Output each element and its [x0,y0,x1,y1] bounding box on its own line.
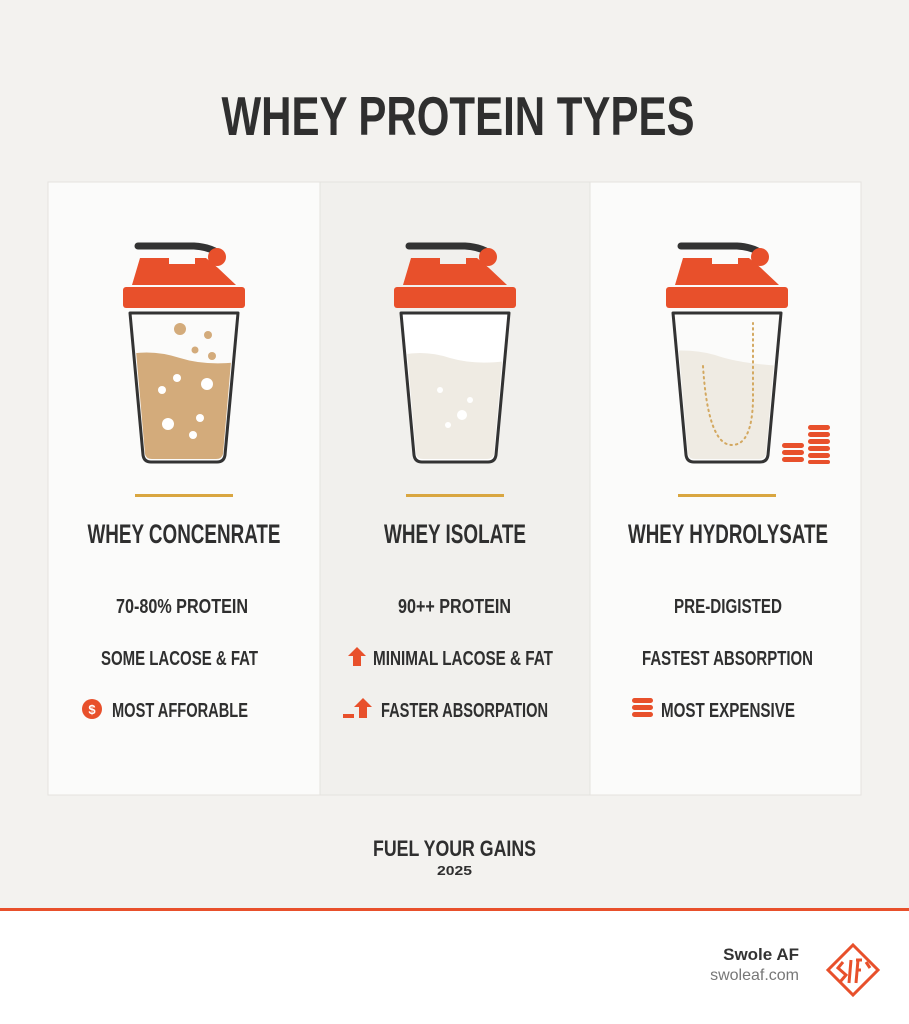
brand text: swoleaf.com [710,967,799,984]
text: isolate facts: MINIMAL LACOSE & FAT [373,648,553,670]
text: isolate facts: 90++ PROTEIN [398,596,511,618]
text: hydrolysate facts: FASTEST ABSORPTION [642,648,813,670]
text: hydrolysate facts: PRE-DIGISTED [674,596,782,618]
title: WHEY PROTEIN TYPES [222,85,694,147]
text: concentrate facts: MOST AFFORABLE [112,700,248,722]
text: concentrate facts [82,596,258,722]
text: concentrate facts: SOME LACOSE & FAT [101,648,258,670]
text: hydrolysate facts: MOST EXPENSIVE [661,700,795,722]
icon: shaker isolate [390,246,516,470]
icon: logo [828,945,878,995]
tagline: 2025 [437,863,472,878]
icon: coin stacks [782,425,830,464]
brand text: Swole AF [723,945,799,964]
heading: whey hydrolysate: WHEY HYDROLYSATE [628,519,828,549]
panel: whey concentrate [48,182,320,795]
icon: shaker hydrolysate [660,246,788,470]
text: concentrate facts: $ [88,702,96,717]
heading: whey concentrate: WHEY CONCENRATE [88,519,280,549]
icon: shaker concentrate [120,246,245,470]
text: concentrate facts: 70-80% PROTEIN [116,596,248,618]
tagline: FUEL YOUR GAINS [373,836,536,861]
panel: whey hydrolysate [590,182,861,795]
brand text [710,945,799,984]
panel: whey isolate [320,182,590,795]
text: isolate facts: FASTER ABSORPATION [381,700,548,722]
text: hydrolysate facts [632,596,813,722]
text: isolate facts [343,596,553,722]
tagline [373,836,536,878]
heading: whey isolate: WHEY ISOLATE [384,519,526,549]
